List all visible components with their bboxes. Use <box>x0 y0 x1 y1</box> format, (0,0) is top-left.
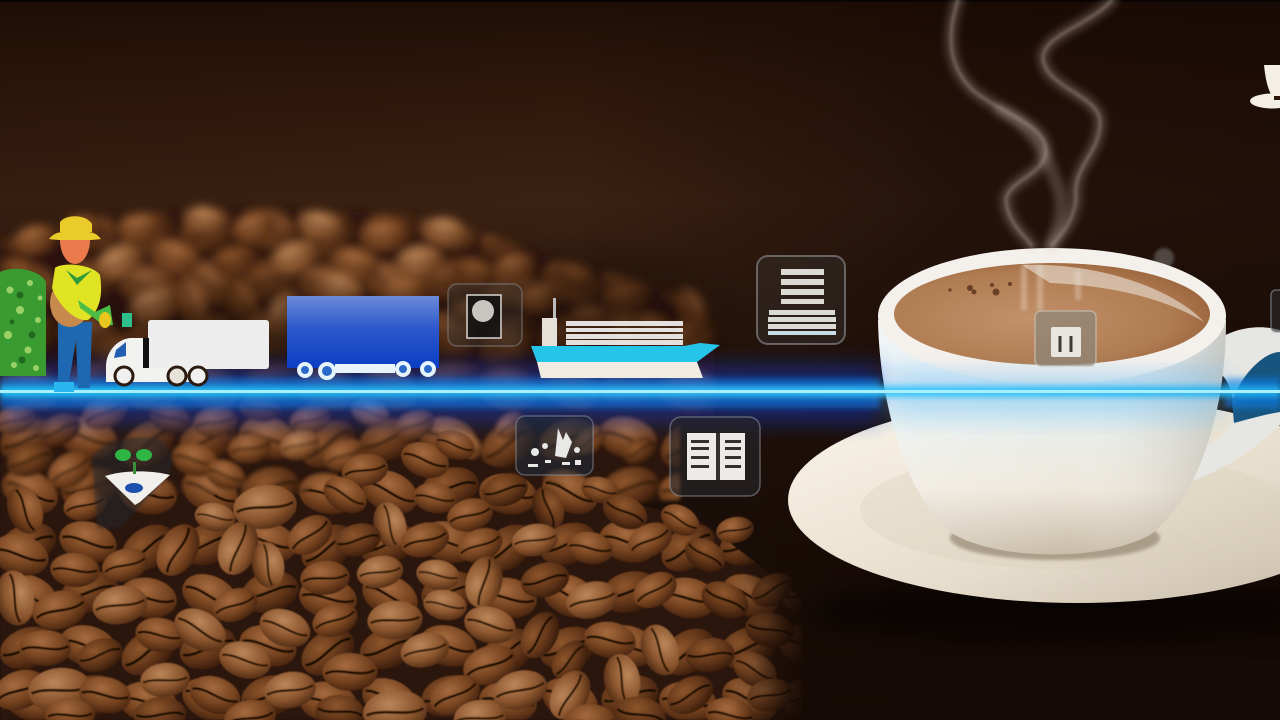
icon panel: menu board <box>670 417 760 496</box>
icon panel: on cup <box>1035 311 1096 366</box>
icon panel: cut off at right edge <box>1271 290 1280 332</box>
glowing blue data beam <box>0 364 1280 424</box>
icon: farmer <box>49 216 132 392</box>
steam <box>951 0 1112 246</box>
icon: seedling with shield <box>92 437 172 528</box>
icon: white truck <box>106 320 269 385</box>
icon panel: coffee package <box>448 284 522 346</box>
sharp coffee beans foreground <box>0 425 805 720</box>
mid coffee beans near beam <box>0 388 680 510</box>
cup body and coffee <box>878 248 1226 555</box>
saucer <box>788 397 1280 642</box>
icon panel: documents <box>757 256 845 344</box>
icon: container ship <box>531 298 720 378</box>
small cup icon top right <box>1250 65 1280 108</box>
icon panel: harvest cluster <box>516 416 593 475</box>
blurred coffee bean pile behind <box>0 203 715 420</box>
icon: coffee plant <box>0 269 46 376</box>
cup handle <box>1190 327 1280 482</box>
sparkle near cup rim <box>1154 248 1174 268</box>
icon: blue trailer <box>287 296 439 378</box>
dark shading over the far pile <box>0 230 760 410</box>
